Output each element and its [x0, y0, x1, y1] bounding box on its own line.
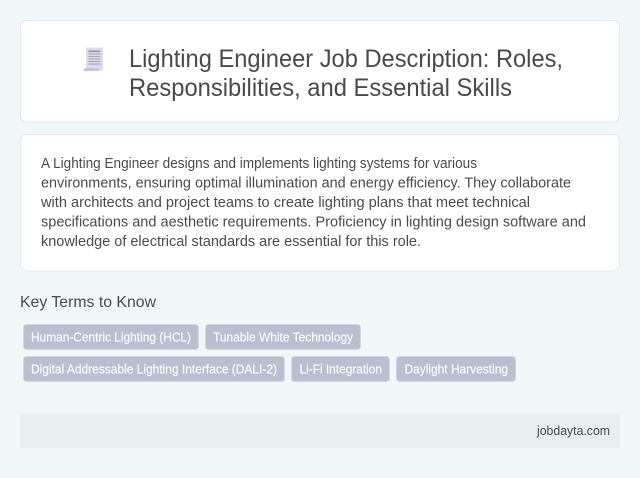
tag: Tunable White Technology — [206, 324, 360, 350]
text block: role summary: A Lighting Engineer designs and implements lighting systems for various — [41, 156, 477, 172]
text block: role summary: specifications and aesthetic requirements. Proficiency in lighting design software and — [41, 214, 586, 230]
text block: role summary: environments, ensuring optimal illumination and energy efficiency. They collaborate — [41, 176, 571, 192]
text block: role summary: knowledge of electrical standards are essential for this role. — [41, 234, 421, 250]
tag: Tunable White Technology: Tunable White Technology — [213, 330, 353, 344]
panel: title header — [20, 20, 620, 122]
text block: role summary — [40, 156, 586, 250]
tag: Li-Fi Integration: Li-Fi Integration — [300, 362, 382, 376]
text block: role summary: with architects and project teams to create lighting plans that meet technical — [40, 195, 530, 211]
tag: Daylight Harvesting — [396, 356, 516, 382]
heading: key terms: Key Terms to Know — [20, 294, 156, 311]
panel: description — [20, 134, 620, 271]
heading: page title: Lighting Engineer Job Description: Roles, — [129, 45, 563, 73]
tag: Human-Centric Lighting: Human-Centric Lighting (HCL) — [31, 330, 191, 344]
heading: page title: Responsibilities, and Essential Skills — [129, 74, 512, 102]
tag: Li-Fi Integration — [292, 356, 390, 382]
footer bar: jobdayta.com — [536, 424, 610, 438]
icon: document scroll — [84, 48, 103, 71]
tag: Daylight Harvesting: Daylight Harvesting — [404, 362, 508, 376]
tag: DALI-2 — [24, 356, 284, 382]
tag: DALI-2: Digital Addressable Lighting Interface (DALI-2) — [31, 362, 277, 376]
heading: page title — [129, 45, 563, 102]
footer bar — [20, 414, 620, 448]
tag: Human-Centric Lighting — [24, 324, 198, 350]
